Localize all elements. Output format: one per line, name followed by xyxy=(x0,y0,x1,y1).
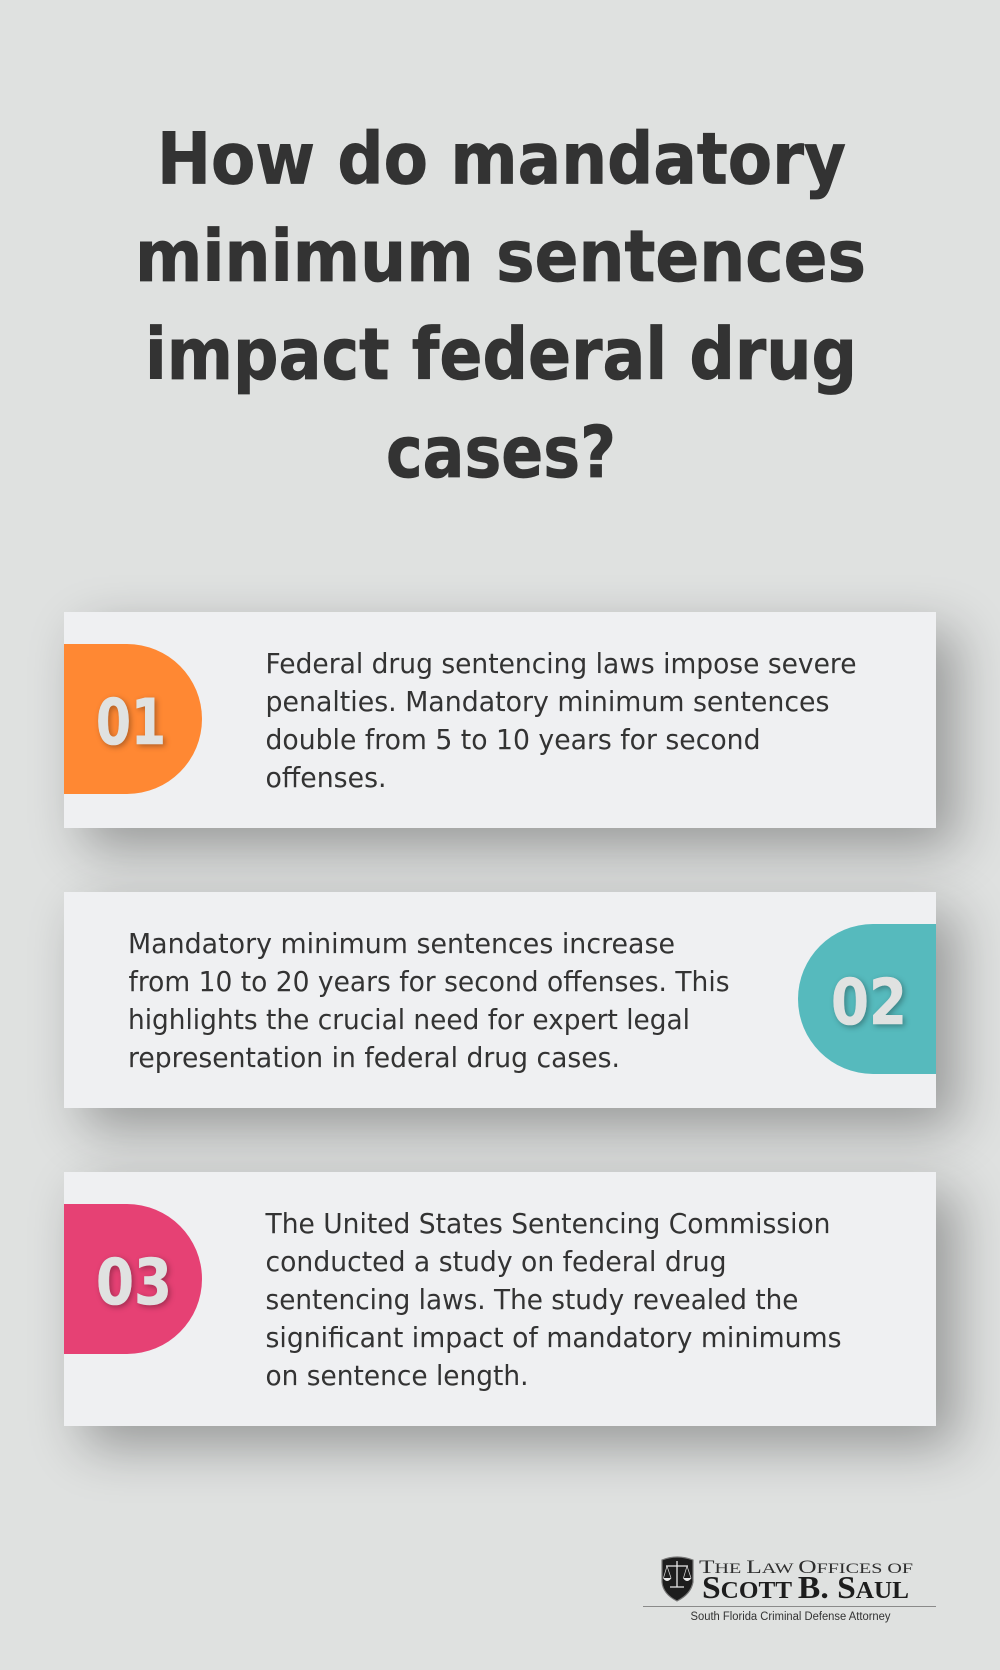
text: step 01 description: offenses. xyxy=(266,762,386,794)
text: step 01 description: double from 5 to 10 years for second xyxy=(266,724,760,756)
text: step 03 description: on sentence length. xyxy=(266,1360,528,1392)
badge: 03 xyxy=(64,1204,202,1354)
logo line 2: SCOTT B. SAUL xyxy=(702,1569,909,1605)
text: step 03 description: sentencing laws. The study revealed the xyxy=(266,1284,798,1316)
logo line 1: T HE L AW O FFICES OF xyxy=(699,1557,913,1578)
text: step 02 description: representation in federal drug cases. xyxy=(128,1042,620,1074)
panel: step 03 xyxy=(64,1172,936,1426)
text: step 02 description: highlights the crucial need for expert legal xyxy=(128,1004,690,1036)
text: step 02 description: Mandatory minimum sentences increase xyxy=(128,928,675,960)
text: step 03 description: The United States Sentencing Commission xyxy=(265,1208,831,1240)
text: step 01 description: penalties. Mandatory minimum sentences xyxy=(266,686,830,718)
text: step 03 description: conducted a study on federal drug xyxy=(266,1246,726,1278)
icon: shield with scales of justice xyxy=(662,1557,693,1601)
badge: 03: 03 xyxy=(96,1246,172,1319)
logo divider xyxy=(643,1606,936,1607)
text: step 03 description: significant impact of mandatory minimums xyxy=(266,1322,842,1354)
logo tagline: South Florida Criminal Defense Attorney xyxy=(690,1611,891,1623)
panel: step 02 xyxy=(64,892,936,1108)
badge: 02 xyxy=(798,924,936,1074)
text: step 02 description xyxy=(128,928,730,1074)
badge: 01 xyxy=(64,644,202,794)
logo: The Law Offices of Scott B. Saul xyxy=(643,1556,936,1623)
title xyxy=(135,118,866,494)
badge: 01: 01 xyxy=(96,686,166,759)
text: step 01 description: Federal drug sentencing laws impose severe xyxy=(266,648,856,680)
text: step 02 description: from 10 to 20 years for second offenses. This xyxy=(128,966,730,998)
text: step 03 description xyxy=(265,1208,842,1392)
title: cases? xyxy=(386,411,616,494)
text: step 01 description xyxy=(266,648,856,794)
badge: 02: 02 xyxy=(831,966,907,1039)
panel: step 01 xyxy=(64,612,936,828)
